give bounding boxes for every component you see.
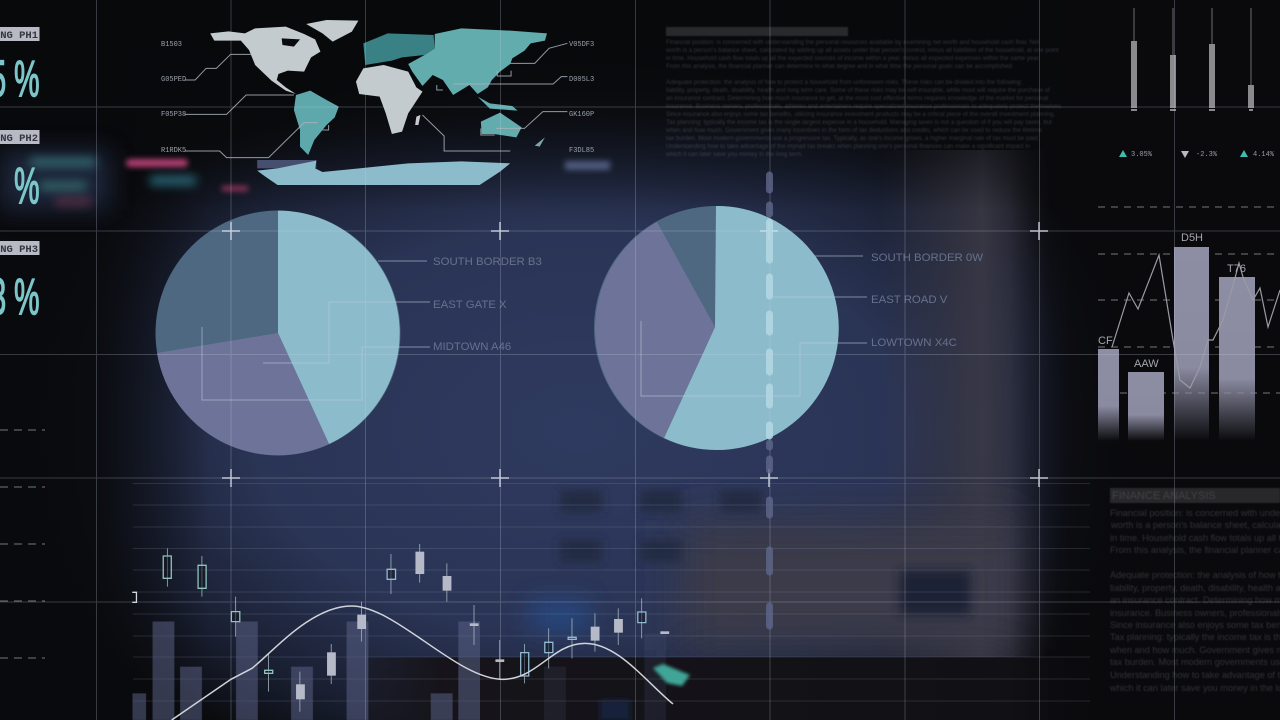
text block: top financial article: when and how much. Government gives many incentives in the form of tax deductions and credits, which can be used to reduce the lifetime [665,127,1043,134]
pie labels right [871,252,983,349]
pie labels left: SOUTH BORDER B3 [433,256,542,268]
map labels: R1RDK5 [161,147,186,155]
text block: top financial article: Tax planning: typically the income tax is the single largest expense in a household. Managing taxes is not a question of if you will pay taxes, but [666,119,1052,126]
world map [185,20,567,185]
map labels: V05DF3 [569,41,594,49]
text block: top financial article: From this analysis, the financial planner can determine to what degree and in what time the personal goals can be accomplished. [666,63,1014,70]
text block: top financial article: Since insurance also enjoys some tax benefits, utilizing insurance investment products may be a critical piece of the overall investment planning. [666,111,1055,118]
map labels: F05P38 [161,111,186,119]
map labels [161,41,594,155]
bottom bars [133,622,666,720]
bar labels: AAW [1134,358,1159,370]
bottom chart horizontal grid [133,484,1090,701]
text block: top financial article: insurance. Business owners, professionals, athletes and entertainers require specialized insurance professionals to adequately protect themselves. [666,103,1063,110]
text block: top financial article: worth is a person's balance sheet, calculated by adding up all assets under that person's control, minus all liabilities of the household, at one point [665,47,1059,54]
bar labels: CF [1098,335,1113,347]
text block: top financial article [665,27,1063,158]
left stat: PH3: NG PH3 [0,244,38,256]
pie chart: right [594,206,983,450]
text block: top financial article: in time. Household cash flow totals up all the expected sources of income within a year, minus all expected expenses within the same year. [666,55,1040,62]
pie chart: left [156,210,542,456]
map labels: G05PED [161,76,186,84]
text block: top financial article: Understanding how to take advantage of the myriad tax breaks when planning one's personal finances can make a significant impact in [666,143,1030,150]
market change indicators: -2.3% [1196,151,1218,159]
bar labels: T76 [1227,263,1246,275]
map labels: F3DL85 [569,147,594,155]
left stat: PH2 [0,130,40,214]
text block: lower right article: FINANCE ANALYSIS [1112,490,1216,502]
pie labels right: SOUTH BORDER 0W [871,252,983,264]
text block: top financial article: an insurance contract. Determining how much insurance to get, at the most cost effective terms requires knowledge of the market for personal [666,95,1048,102]
map leader lines [185,43,567,158]
map labels: B1503 [161,41,182,49]
right candles [1131,8,1254,111]
market change indicators: 4.14% [1253,151,1275,159]
map labels: GK160P [569,111,594,119]
pie labels left [433,256,542,353]
text block: lower right article [1109,488,1280,693]
pie labels right: EAST ROAD V [871,294,948,306]
pie labels left: MIDTOWN A46 [433,341,511,353]
market change indicators: 3.05% [1131,151,1153,159]
text block: top financial article: liability, property, death, disability, health and long term care. Some of these risks may be self-insurable, while most will require the purchase of [666,87,1050,94]
bar labels [1098,232,1246,370]
pie callout lines: left [202,261,430,400]
left dashed ticks [0,430,45,658]
left stat: PH3 [0,241,40,325]
teal blurred streak [653,664,690,686]
left stat: PH2: NG PH2 [0,133,38,145]
text block: top financial article: tax burden. Most modern governments use a progressive tax. Typically, as one's income grows, a higher marginal rate of tax must be paid. [666,135,1039,142]
light streaks [30,158,610,205]
market change indicators [1119,150,1275,159]
text block: top financial article: Financial position: is concerned with understanding the personal resources available by examining net worth and household cash flow. Net [666,39,1039,46]
left stat: PH2: % [14,157,40,214]
right bar chart [1098,207,1280,441]
text block: top financial article: Adequate protection: the analysis of how to protect a household from unforeseen risks. These risks can be divided into the following: [666,79,1023,86]
bottom candlestick chart [132,544,673,720]
bar labels: D5H [1181,232,1203,244]
crosshair markers [222,222,1048,487]
text block: top financial article: which it can later save you money in the long term. [665,151,803,158]
pie callout lines: right [641,256,867,396]
pie labels left: EAST GATE X [433,299,507,311]
left stat: PH1: NG PH1 [0,30,38,42]
map labels: D005L3 [569,76,594,84]
vertical dashed marker [766,175,773,626]
pie labels right: LOWTOWN X4C [871,337,957,349]
